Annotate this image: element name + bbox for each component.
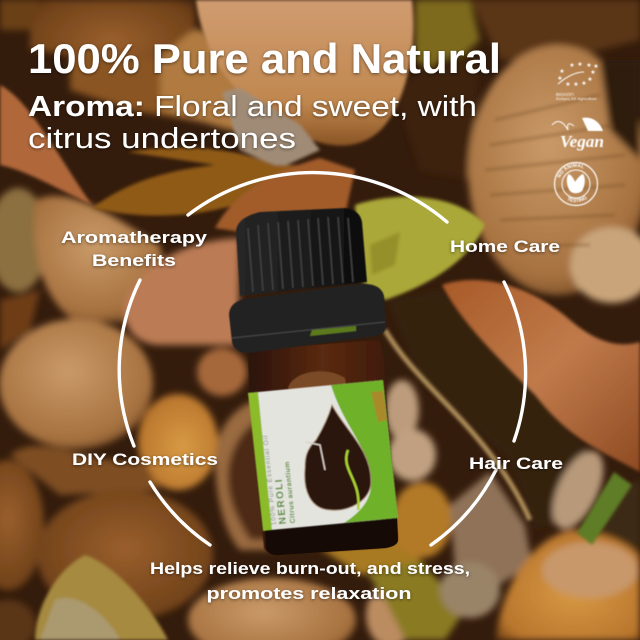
leaves centre — [92, 148, 325, 216]
label text: 100% Pure Essential Oil — [262, 435, 278, 525]
icon: EU organic badge — [556, 61, 599, 101]
icon: EU organic badge: ★ — [586, 62, 592, 69]
bottom benefit text: promotes relaxation — [206, 585, 412, 603]
yellow-green leaf behind the cap — [355, 197, 485, 300]
grey rough fragment — [222, 88, 320, 168]
label: home care: Home Care — [450, 238, 560, 256]
label: aromatherapy benefits: Aromatherapy — [61, 229, 208, 247]
aroma description: Aroma: Floral and sweet, with — [28, 91, 477, 123]
essential oil bottle — [229, 208, 398, 555]
large top shell — [196, 0, 413, 146]
green stem — [577, 472, 632, 545]
icon: EU organic badge: ★ — [569, 62, 575, 69]
icon: EU organic badge: ★ — [577, 61, 583, 68]
label: DIY cosmetics: DIY Cosmetics — [72, 451, 218, 469]
black dropper cap — [229, 208, 386, 353]
pale leaf bottom left — [35, 555, 168, 640]
icon: no animal testing badge — [553, 161, 599, 207]
icon: vegan badge — [552, 118, 604, 151]
label: aromatherapy benefits — [61, 229, 208, 270]
label: aromatherapy benefits: Benefits — [92, 252, 176, 270]
icon: no animal testing badge: TESTING — [567, 196, 588, 203]
label text: NEROLI — [274, 479, 289, 525]
icon: EU organic badge: ★ — [590, 69, 596, 76]
label: hair care: Hair Care — [469, 455, 563, 473]
icon: EU organic badge: Κύπρος ΕΕ Agriculture — [556, 96, 597, 101]
label text: Citrus aurantium — [284, 461, 297, 524]
mushroom gills texture — [485, 95, 625, 245]
label text — [262, 433, 297, 525]
long shell at right — [442, 280, 640, 472]
icon: EU organic badge: ΒΙΟΛΟΓΙ — [556, 92, 574, 97]
aroma description — [28, 91, 477, 155]
dried leaf left — [0, 85, 92, 205]
icon: EU organic badge: ★ — [573, 81, 579, 88]
product label — [248, 380, 398, 531]
icon: vegan badge: Vegan — [560, 132, 604, 151]
bottom benefit text — [150, 560, 470, 603]
bottom benefit text: Helps relieve burn-out, and stress, — [150, 560, 470, 578]
icon: EU organic badge: ★ — [565, 81, 571, 88]
icon: EU organic badge: ★ — [593, 63, 599, 70]
label oil drop — [305, 405, 371, 510]
icon: EU organic badge: ★ — [557, 75, 563, 82]
circular arcs frame — [119, 173, 526, 545]
icon: EU organic badge: ★ — [587, 76, 593, 83]
icon: no animal testing badge: NO ANIMAL — [556, 163, 584, 178]
bottle glass — [248, 340, 398, 555]
icon: EU organic badge: ★ — [559, 68, 565, 75]
aroma description: citrus undertones — [28, 123, 296, 155]
title: 100% Pure and Natural — [28, 35, 501, 82]
icon: EU organic badge: ★ — [581, 80, 587, 87]
